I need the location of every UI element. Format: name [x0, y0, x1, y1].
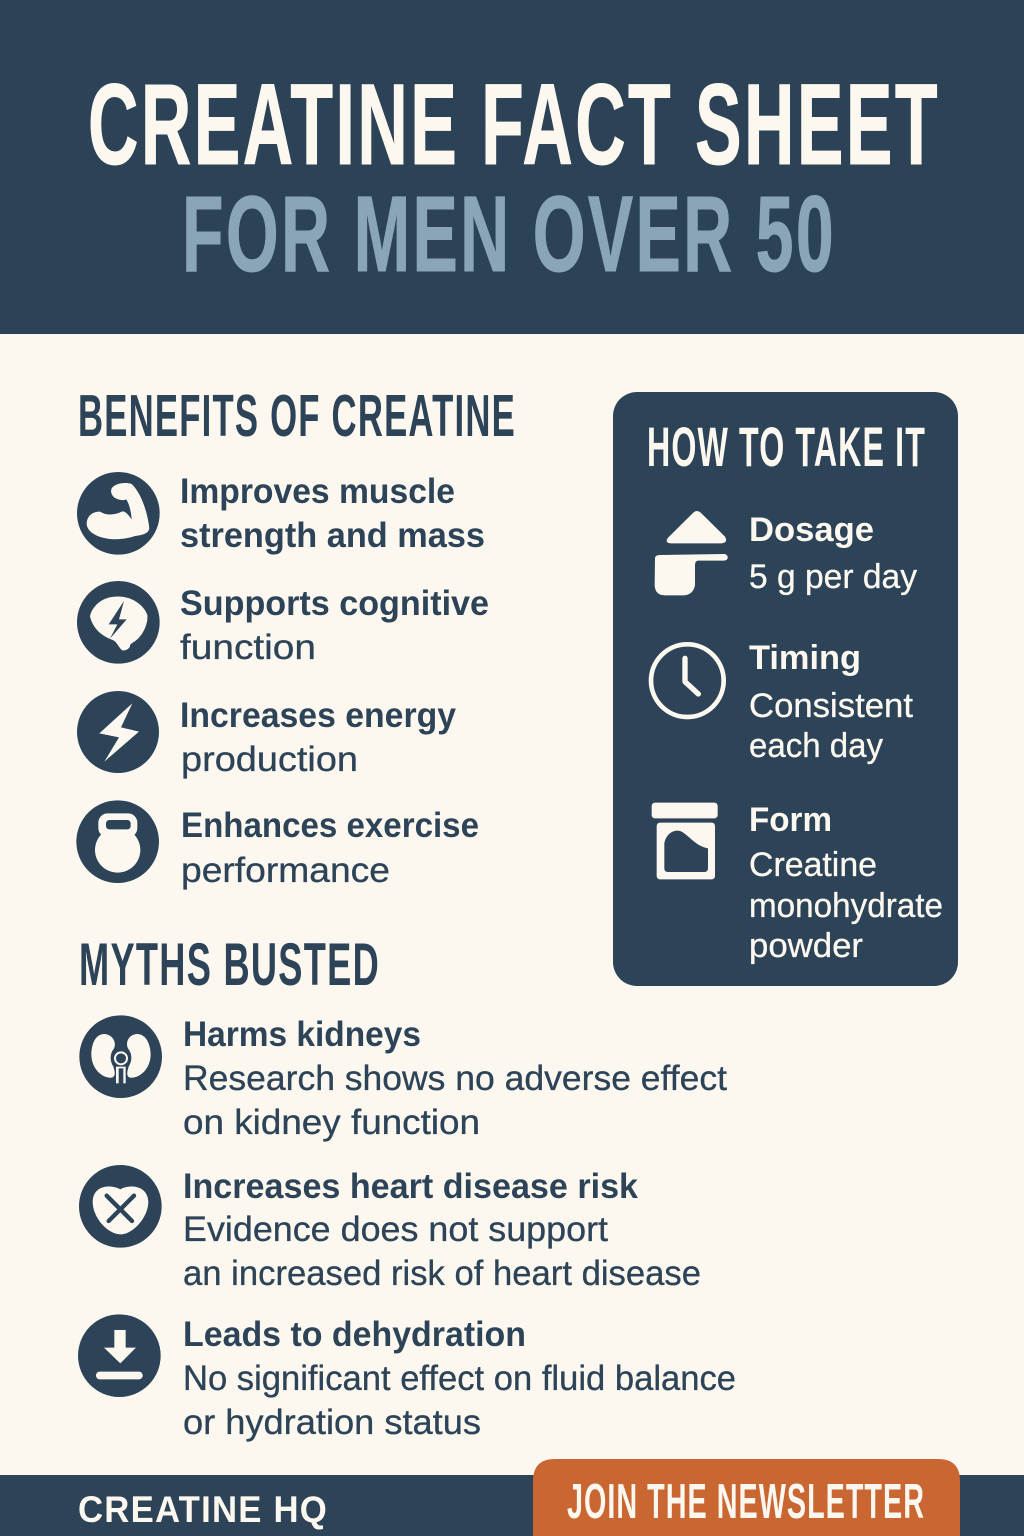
text: dosage: 5 g per day	[749, 558, 917, 596]
text: dosage: Dosage	[749, 511, 874, 549]
icon: brain with bolt	[77, 581, 160, 664]
text: harms kidneys: on kidney function	[183, 1103, 480, 1142]
heading: benefits: BENEFITS OF CREATINE	[78, 383, 516, 449]
text: supports cognitive: Supports cognitive	[180, 584, 489, 623]
panel: benefits of creatine	[76, 383, 516, 890]
text: increases heart disease risk	[183, 1167, 701, 1293]
text: timing: Consistent	[749, 687, 914, 725]
panel: how to take it	[613, 392, 958, 986]
icon: download arrow	[78, 1314, 161, 1397]
text: harms kidneys: Research shows no adverse effect	[183, 1059, 727, 1098]
panel: myths busted	[78, 931, 736, 1442]
text: form: monohydrate	[749, 887, 943, 925]
text: leads to dehydration: or hydration status	[183, 1403, 481, 1442]
icon: clock	[651, 644, 724, 717]
footer bar	[0, 1459, 1024, 1536]
text: harms kidneys: Harms kidneys	[183, 1015, 421, 1054]
text: enhances exercise: Enhances exercise	[181, 806, 479, 845]
footer brand: CREATINE HQ	[78, 1489, 328, 1530]
text: increases heart disease risk: Evidence does not support	[183, 1210, 608, 1249]
text: form: Creatine	[749, 846, 877, 884]
text: enhances exercise: performance	[181, 851, 390, 890]
header banner	[0, 0, 1024, 334]
text: supports cognitive: function	[180, 628, 316, 667]
button: join the newsletter	[533, 1459, 960, 1536]
text: leads to dehydration: Leads to dehydration	[183, 1315, 526, 1354]
icon: scoop of powder	[655, 511, 728, 595]
text: improves muscle	[180, 472, 485, 555]
icon: lightning bolt	[77, 691, 159, 773]
text: leads to dehydration	[183, 1315, 736, 1442]
text: increases energy	[180, 696, 457, 779]
icon: powder jar	[652, 803, 718, 879]
heading: myths busted: MYTHS BUSTED	[79, 931, 380, 998]
text: timing: Timing	[749, 639, 861, 677]
text: timing	[749, 639, 914, 765]
icon: kettlebell	[76, 800, 159, 883]
text: improves muscle: Improves muscle	[180, 472, 455, 511]
text: leads to dehydration: No significant effect on fluid balance	[183, 1359, 736, 1398]
text: enhances exercise	[181, 806, 479, 890]
text: dosage	[749, 511, 917, 596]
text: form: powder	[749, 927, 863, 965]
text: supports cognitive	[180, 584, 489, 667]
text: increases energy: production	[181, 740, 358, 779]
text: form: Form	[749, 801, 832, 839]
text: form	[749, 801, 943, 965]
icon: kidneys	[79, 1015, 162, 1098]
text: increases energy: Increases energy	[180, 696, 457, 735]
text: harms kidneys	[183, 1015, 727, 1142]
text: increases heart disease risk: Increases heart disease risk	[183, 1167, 639, 1206]
text: timing: each day	[749, 727, 883, 765]
text: increases heart disease risk: an increased risk of heart disease	[183, 1254, 701, 1293]
icon: flexed muscle	[77, 472, 160, 555]
text: improves muscle: strength and mass	[180, 516, 485, 555]
icon: heart with x	[79, 1165, 162, 1248]
